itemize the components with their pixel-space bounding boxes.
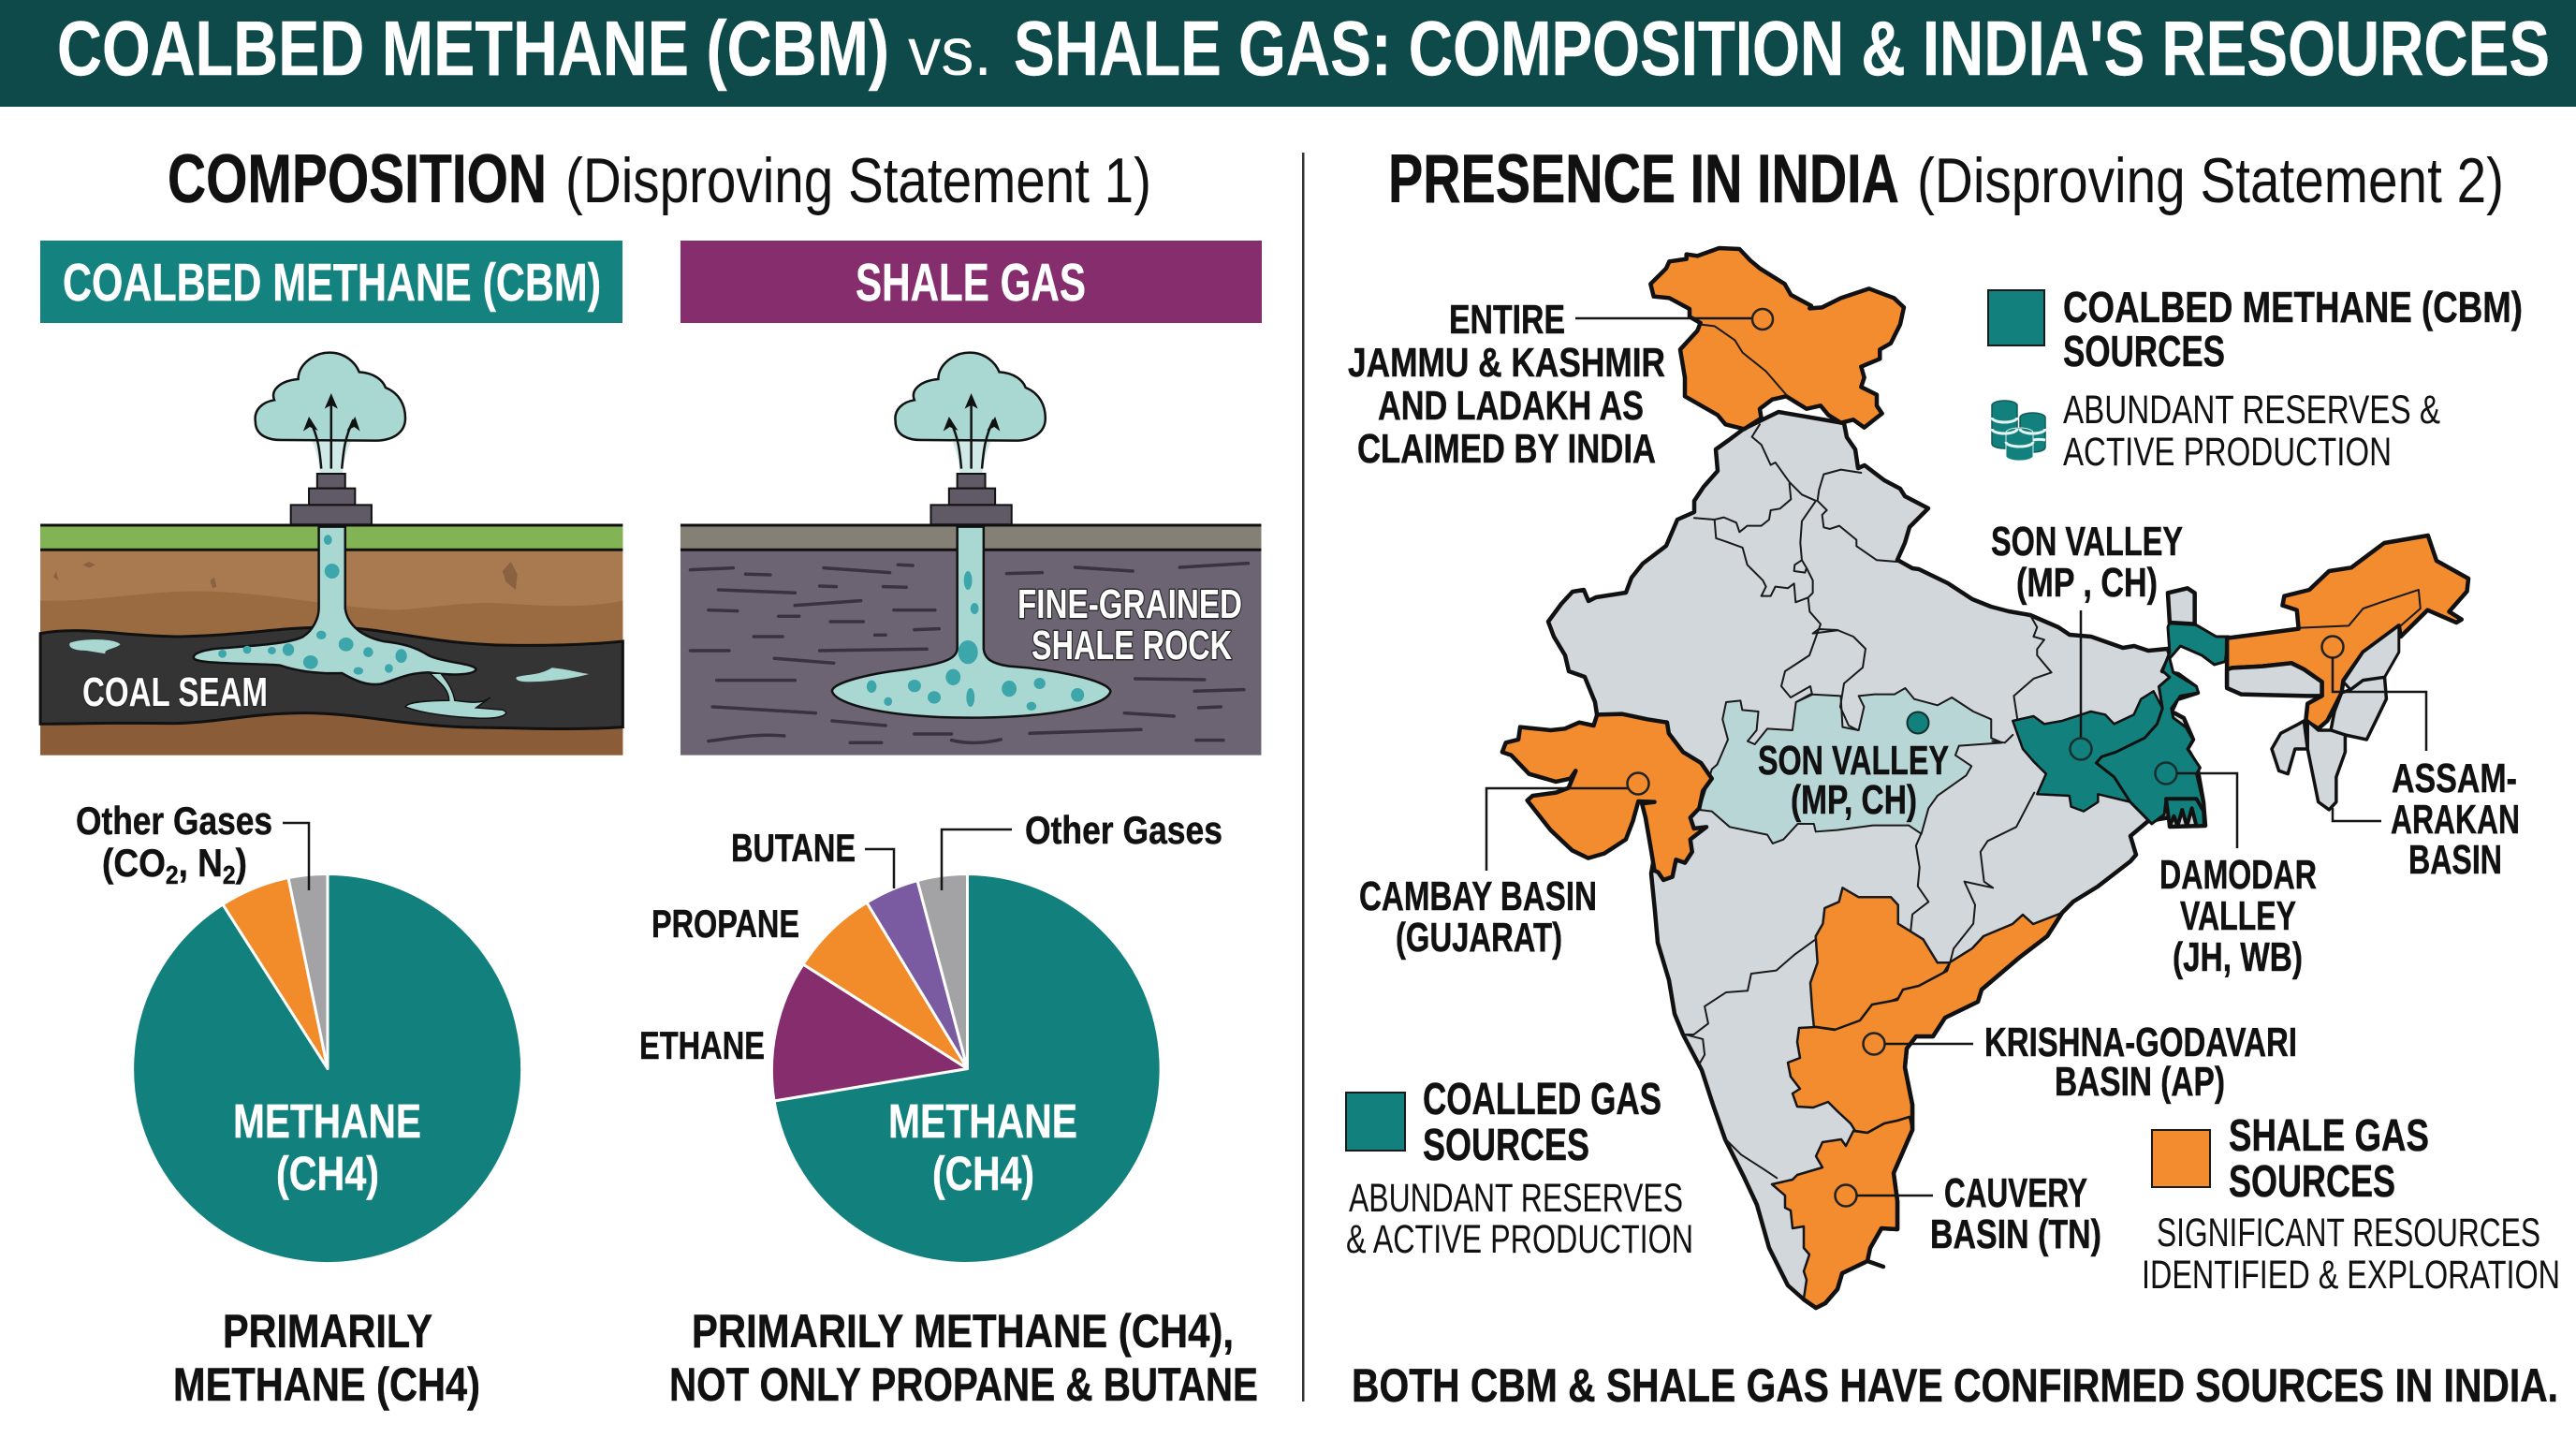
region: north-east states: [2168, 536, 2468, 810]
label: methane: METHANE: [233, 1094, 421, 1148]
title: [57, 5, 2550, 92]
callout: Cambay Basin: CAMBAY BASIN: [1359, 874, 1597, 919]
region: mainland base: [1548, 412, 2205, 1308]
heading: composition: COMPOSITION: [168, 141, 547, 217]
legend: coalled gas sources: [1346, 1075, 1693, 1262]
label: ethane: ETHANE: [639, 1023, 765, 1067]
callout: Krishna-Godavari Basin: [1863, 1020, 2297, 1105]
callout: Assam-Arakan Basin: ARAKAN: [2391, 798, 2520, 843]
east coast outline: [1804, 913, 2062, 1308]
callout: Son Valley top: SON VALLEY: [1991, 520, 2183, 565]
region: Jammu and Kashmir and Ladakh: [1650, 248, 1904, 429]
callout: Son Valley central: SON VALLEY: [1758, 739, 1949, 784]
map: India with CBM and shale gas regions: [1502, 248, 2468, 1308]
callout: Cambay Basin: [1359, 773, 1649, 961]
legend: coalled gas sources: ABUNDANT RESERVES: [1349, 1176, 1683, 1221]
label: fine-grained shale rock: FINE-GRAINED: [1017, 581, 1242, 627]
state borders: [1685, 424, 2052, 1178]
label: methane: [888, 1094, 1077, 1200]
legend: coalled gas sources: SOURCES: [1423, 1121, 1589, 1170]
legend: coalled gas sources: & ACTIVE PRODUCTION: [1346, 1217, 1693, 1262]
icon: stacked reserves: [1992, 401, 2045, 461]
callout: Damodar Valley: VALLEY: [2180, 894, 2296, 939]
region: Andhra Pradesh and Krishna-Godavari: [1788, 913, 2062, 1133]
label: other gases (CBM): [76, 799, 309, 890]
label: butane: BUTANE: [731, 826, 856, 870]
callout: Damodar Valley: [2155, 762, 2317, 980]
label: other gases (CBM): (CO: [102, 841, 174, 885]
label: methane: (CH4): [932, 1147, 1034, 1200]
panel: CBM column header: [40, 241, 622, 323]
caption: CBM composition: PRIMARILY: [223, 1305, 432, 1357]
pie chart: shale gas composition: [771, 874, 1161, 1263]
callout: Jammu and Kashmir: JAMMU & KASHMIR: [1348, 341, 1665, 386]
legend: CBM sources: ACTIVE PRODUCTION: [2063, 430, 2392, 475]
region: Madhya Pradesh and Chhattisgarh (Son Valley): [1699, 688, 2002, 844]
heading: presence in India: [1388, 141, 2504, 217]
label: methane: METHANE: [888, 1094, 1077, 1148]
label: methane: (CH4): [276, 1147, 379, 1200]
callout: Cambay Basin: (GUJARAT): [1396, 916, 1562, 961]
pie chart: CBM composition: [133, 873, 522, 1263]
callout: Son Valley top: (MP , CH): [2016, 561, 2158, 606]
callout: Assam-Arakan Basin: [2321, 637, 2520, 883]
panel: CBM column header: COALBED METHANE (CBM): [63, 253, 601, 313]
callout: Son Valley central: (MP, CH): [1791, 778, 1917, 823]
caption: shale composition: PRIMARILY METHANE (CH4),: [692, 1305, 1234, 1357]
heading: composition: [168, 141, 1151, 217]
callout: Jammu and Kashmir: CLAIMED BY INDIA: [1357, 427, 1656, 472]
panel: shale gas column header: [681, 241, 1262, 323]
heading: presence in India: PRESENCE IN INDIA: [1388, 141, 1899, 217]
region: Gujarat: [1502, 714, 1712, 880]
header banner: [0, 0, 2576, 107]
callout: Son Valley central: [1758, 712, 1949, 823]
legend: CBM sources: SOURCES: [2063, 327, 2225, 375]
label: methane: [233, 1094, 421, 1200]
title: COALBED METHANE (CBM): [57, 5, 889, 92]
label: other gases (CBM): ): [236, 841, 247, 885]
callout: Jammu and Kashmir: ENTIRE: [1449, 298, 1565, 343]
region: Jharkhand: [2012, 691, 2162, 812]
illustration: shale rock well cross-section: [681, 525, 1261, 756]
icon: wellhead and gas cloud (shale): [895, 353, 1046, 524]
legend: shale gas sources: SHALE GAS: [2229, 1111, 2429, 1161]
icon: wellhead and gas cloud (CBM): [256, 353, 405, 524]
region: West Bengal: [2096, 623, 2229, 827]
callout: Son Valley top: [1991, 520, 2183, 760]
region: Telangana: [1810, 888, 1950, 1030]
region: Tamil Nadu: [1772, 1117, 1912, 1308]
legend: CBM sources: ABUNDANT RESERVES &: [2063, 388, 2440, 433]
illustration: coal seam well cross-section: [40, 525, 622, 756]
callout: Damodar Valley: DAMODAR: [2159, 853, 2317, 898]
label: coal seam: COAL SEAM: [82, 669, 268, 715]
callout: Assam-Arakan Basin: BASIN: [2408, 838, 2502, 883]
callout: Cauvery Basin: BASIN (TN): [1930, 1212, 2101, 1257]
callout: Cauvery Basin: [1835, 1171, 2101, 1257]
label: other gases (CBM): 2: [166, 860, 179, 889]
label: other gases (CBM): , N: [179, 841, 223, 885]
caption: CBM composition: [173, 1305, 480, 1411]
label: propane: PROPANE: [651, 902, 799, 946]
callout: Damodar Valley: (JH, WB): [2173, 935, 2303, 980]
callout: Jammu and Kashmir: AND LADAKH AS: [1378, 384, 1644, 429]
caption: CBM composition: METHANE (CH4): [173, 1358, 480, 1411]
label: other gases (CBM): 2: [223, 860, 236, 889]
callout: Krishna-Godavari Basin: KRISHNA-GODAVARI: [1984, 1020, 2297, 1065]
legend: CBM sources: [1988, 283, 2523, 475]
callout: Cauvery Basin: CAUVERY: [1944, 1171, 2087, 1216]
legend: coalled gas sources: COALLED GAS: [1423, 1075, 1661, 1124]
callout: Krishna-Godavari Basin: BASIN (AP): [2055, 1060, 2225, 1105]
legend: shale gas sources: [2142, 1111, 2560, 1298]
panel: shale gas column header: SHALE GAS: [856, 253, 1086, 313]
label: fine-grained shale rock: [1017, 581, 1242, 668]
label: other gases (CBM): Other Gases: [76, 799, 272, 843]
caption: shale composition: [669, 1305, 1258, 1411]
label: other gases (shale): Other Gases: [1025, 808, 1222, 852]
caption: shale composition: NOT ONLY PROPANE & BUTANE: [669, 1358, 1258, 1411]
label: butane: [731, 826, 894, 888]
callout: Jammu and Kashmir: [1348, 298, 1773, 472]
legend: shale gas sources: SOURCES: [2229, 1157, 2395, 1207]
label: other gases (shale): [942, 808, 1222, 890]
callout: Assam-Arakan Basin: ASSAM-: [2392, 756, 2517, 801]
label: fine-grained shale rock: SHALE ROCK: [1032, 623, 1232, 668]
title: vs.: [908, 15, 992, 90]
heading: composition: (Disproving Statement 1): [565, 145, 1151, 216]
